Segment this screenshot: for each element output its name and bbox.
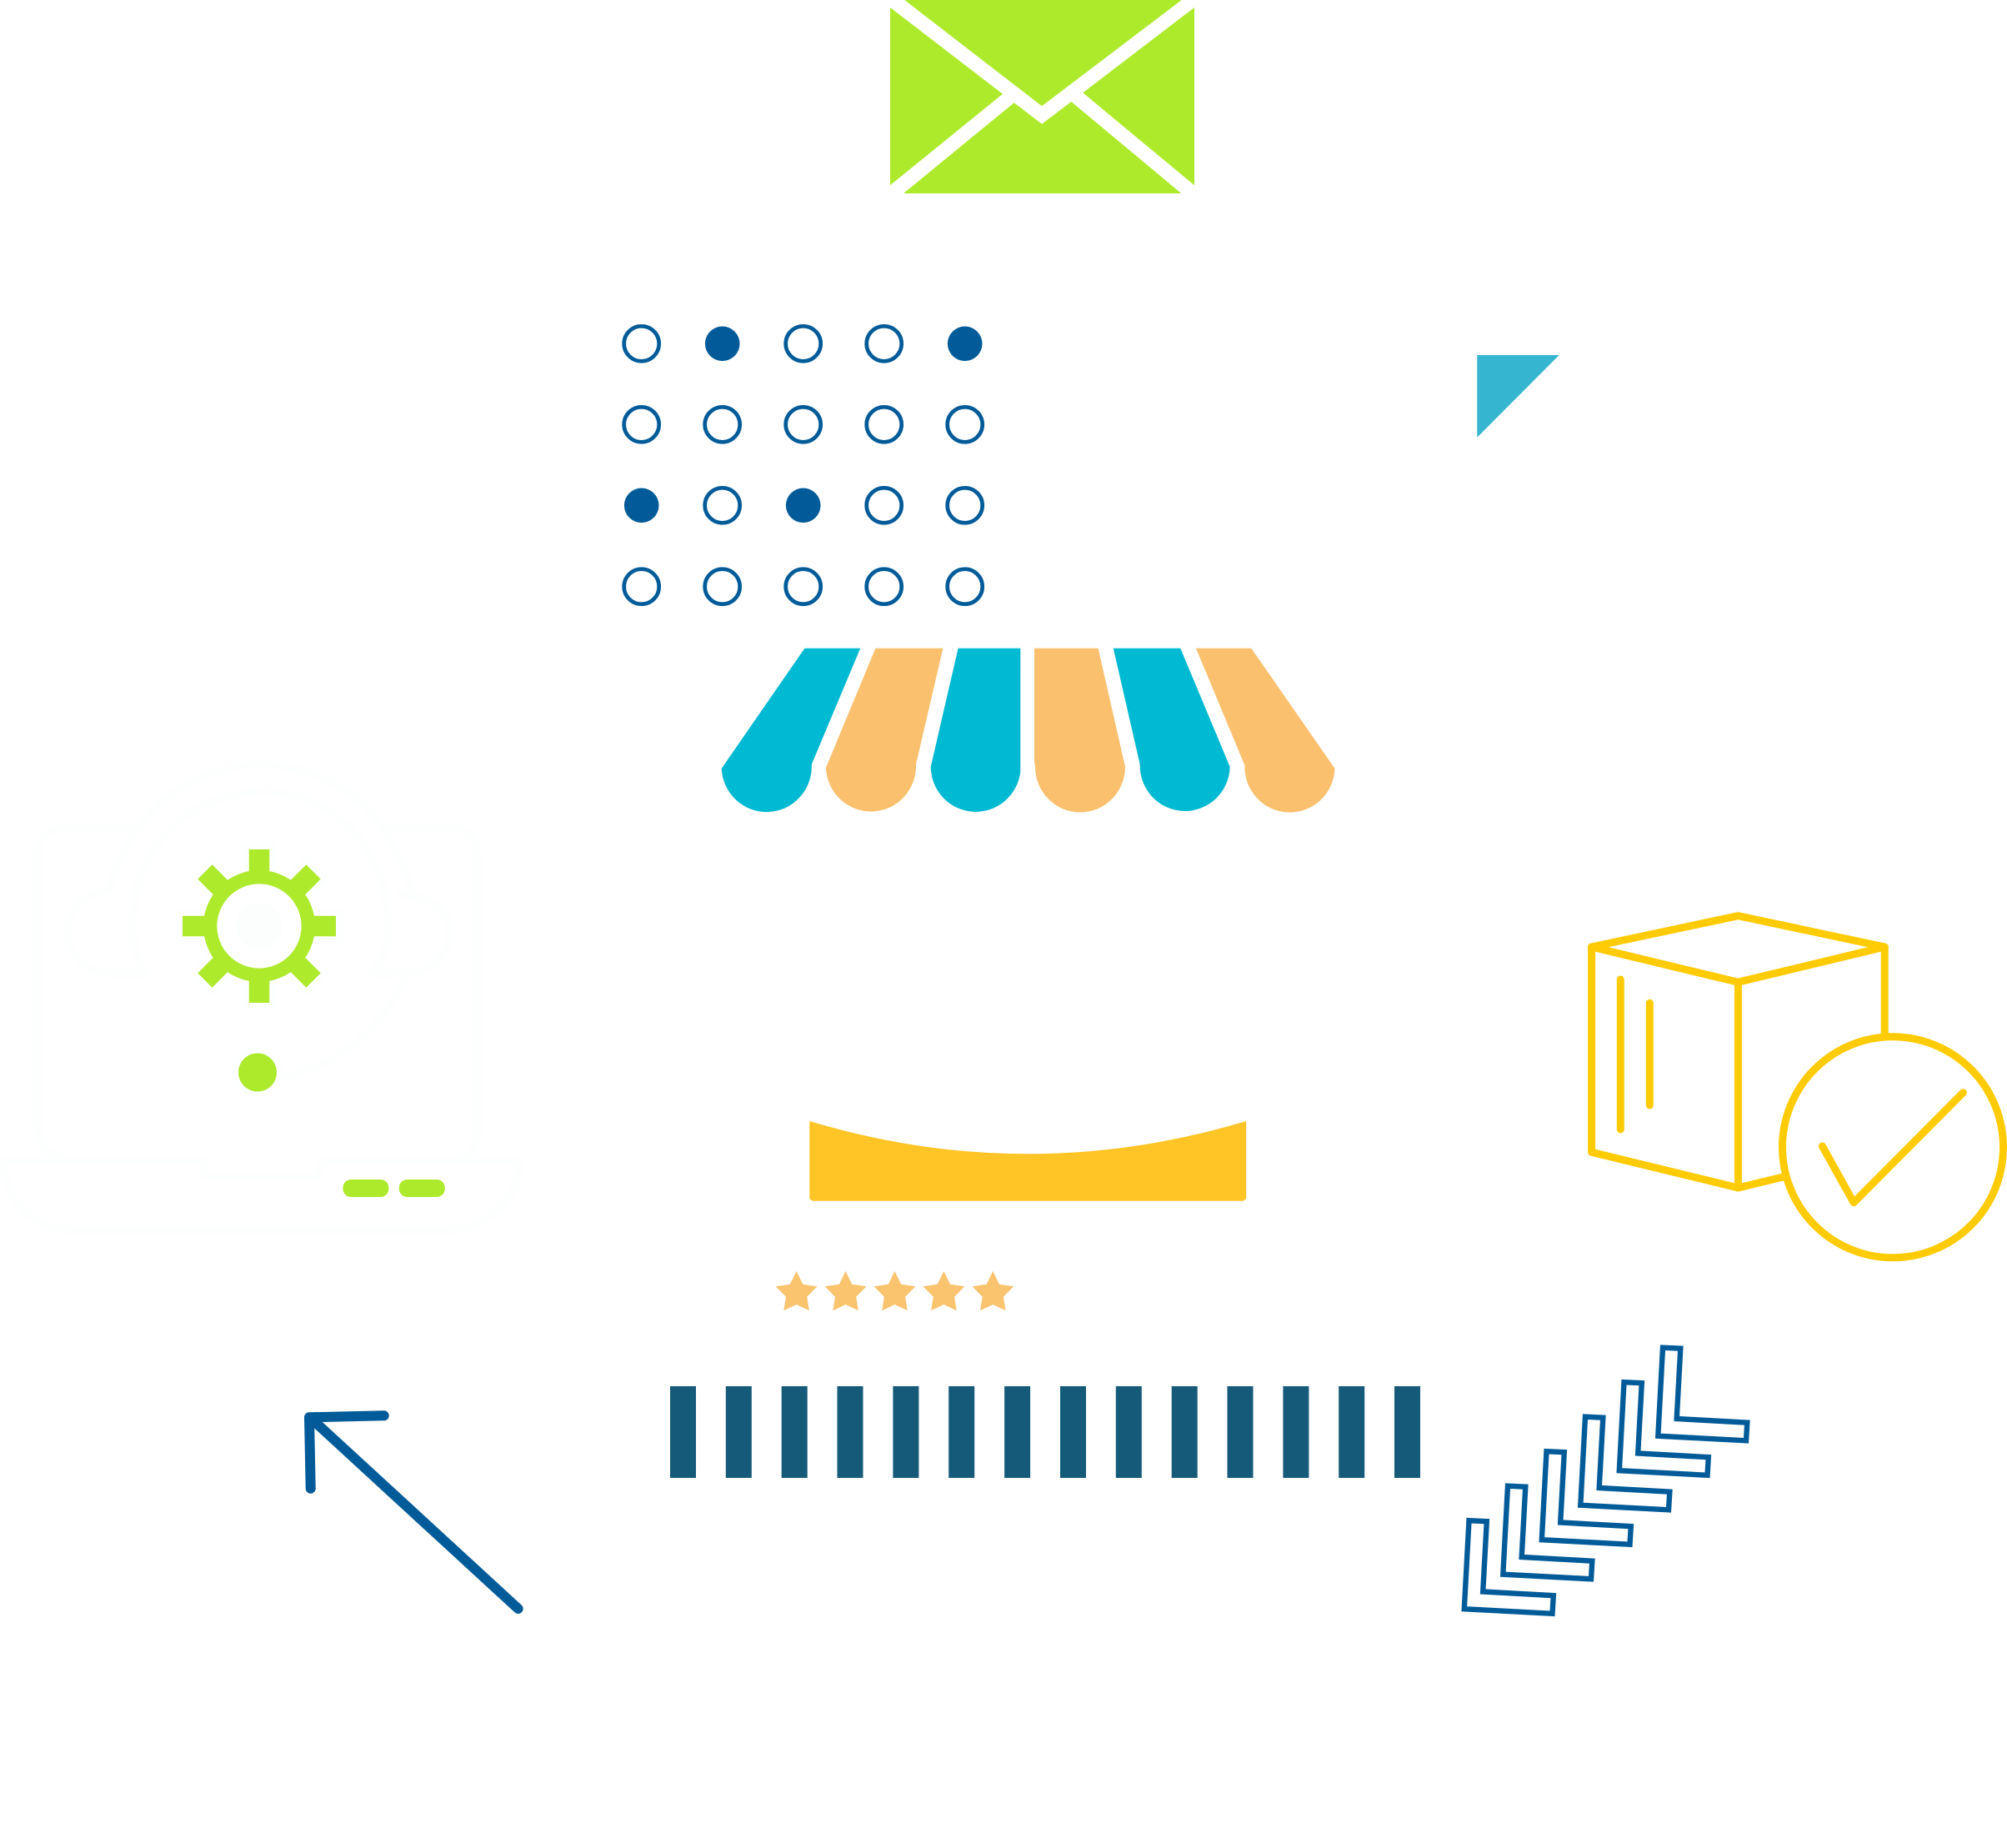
icon: gear	[183, 849, 336, 1003]
chevron stack	[1464, 1348, 1747, 1614]
striped bar row	[670, 1386, 1420, 1478]
icon: corner triangle	[1477, 355, 1559, 438]
star rating	[776, 1271, 1014, 1310]
laptop keys	[343, 1179, 445, 1197]
icon: envelope	[890, 0, 1194, 193]
arrow pointing up-left	[309, 1415, 518, 1609]
icon: shop awning	[722, 649, 1335, 813]
icon: box with check mark	[1592, 916, 2004, 1258]
icon: laptop support agent	[3, 765, 520, 1230]
icon: dot grid	[624, 326, 983, 604]
icon: microphone dot	[238, 1054, 277, 1092]
laptop and headset faint outline	[3, 765, 520, 1230]
curved yellow banner	[809, 1121, 1246, 1201]
